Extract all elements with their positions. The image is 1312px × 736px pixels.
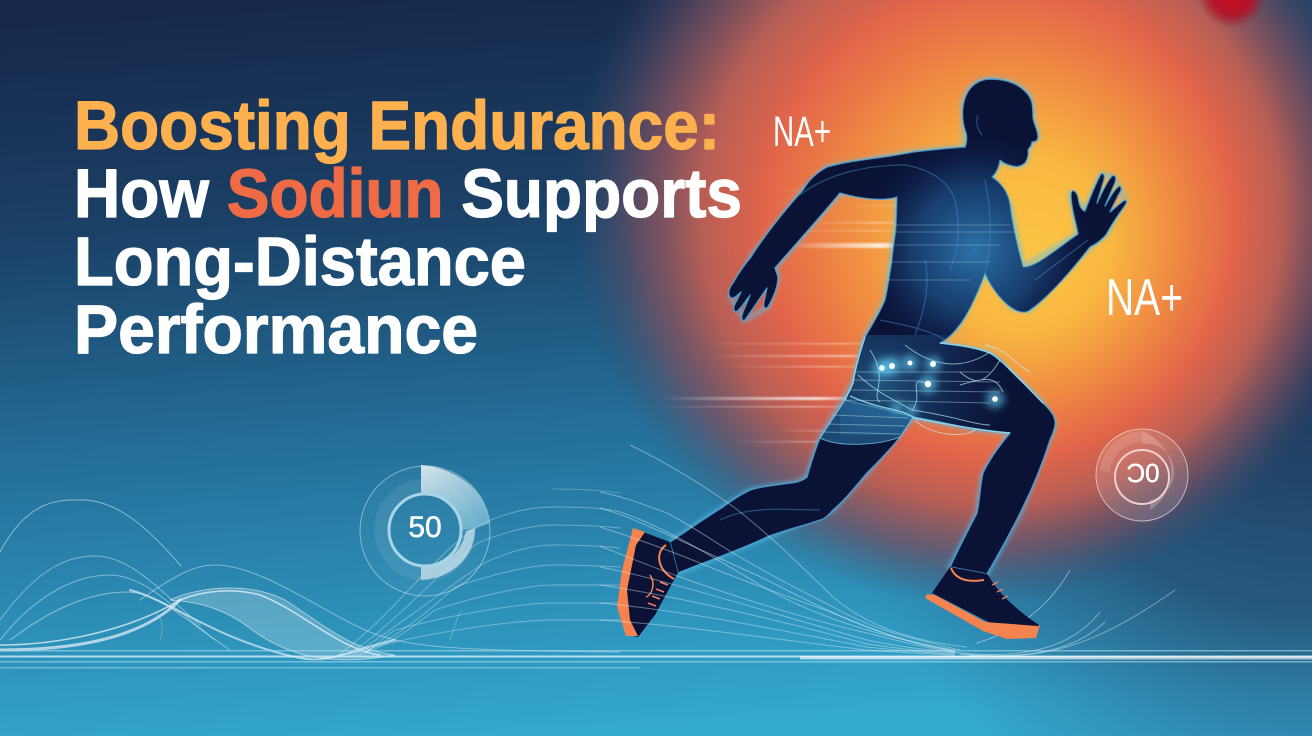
shorts streaks bbox=[824, 372, 1000, 434]
gauge lower arc bbox=[421, 528, 475, 580]
translucent wave ribbon bbox=[170, 588, 395, 660]
ground light lines bbox=[0, 650, 1312, 668]
title line: Boosting Endurance: Boosting Endurance: bbox=[74, 87, 720, 164]
speed streaks behind runner bbox=[650, 190, 960, 442]
rear shoe sole bbox=[617, 528, 645, 636]
title line: Performance: Performance bbox=[74, 291, 478, 368]
front shoe laces bbox=[992, 582, 1008, 599]
gauge: 50 bbox=[360, 465, 490, 596]
front shoe bbox=[925, 567, 1040, 639]
gauge value: 50 bbox=[408, 511, 442, 544]
nerve lines bbox=[858, 345, 1030, 435]
fan lines converging under runner bbox=[600, 445, 967, 655]
title bbox=[74, 87, 742, 368]
runner rim glow bbox=[670, 79, 1125, 574]
shorts lower panel bbox=[820, 400, 913, 444]
hip rim light bbox=[845, 337, 1043, 433]
hip and shorts energy section bbox=[820, 335, 1043, 444]
front shoe sole bbox=[925, 594, 1040, 639]
rear shoe laces bbox=[648, 582, 668, 606]
glowing sodium points bbox=[873, 355, 1004, 416]
gauge upper arc bbox=[421, 465, 490, 530]
torso musculature bbox=[882, 144, 1082, 352]
front shoe collar bbox=[951, 568, 984, 581]
runner bbox=[617, 79, 1127, 639]
gauge disc bbox=[1096, 429, 1188, 521]
gauge inner ring bbox=[389, 494, 461, 566]
rear shoe upper bbox=[622, 530, 678, 637]
sodium label, left of head: NA+ bbox=[773, 108, 831, 156]
title line: How Sodiun Supports: How Sodiun Supports bbox=[74, 155, 742, 232]
torso speed streaks bbox=[888, 225, 1015, 280]
rear shoe swoosh bbox=[646, 575, 653, 597]
gauge: right bbox=[1096, 429, 1188, 521]
gauge soft band bbox=[381, 486, 469, 574]
flowing wave lines bbox=[0, 489, 1175, 659]
gauge inner ring bbox=[1115, 450, 1169, 504]
gauge value: Ɔ0 bbox=[1126, 458, 1160, 488]
rear shoe bbox=[617, 528, 678, 637]
body contour highlights bbox=[720, 115, 1088, 570]
red corner spot bbox=[1190, 0, 1270, 34]
glowing hip fill bbox=[840, 335, 986, 435]
gauge left arc bbox=[1100, 431, 1142, 472]
runner silhouette bbox=[670, 79, 1127, 574]
gauge right arc bbox=[1142, 431, 1174, 510]
gauge outer ring bbox=[360, 466, 490, 596]
sodium label, right of arm: NA+ bbox=[1106, 269, 1183, 327]
title line: Long-Distance: Long-Distance bbox=[74, 223, 526, 300]
front shoe upper bbox=[932, 567, 1039, 632]
rear shoe collar bbox=[659, 545, 674, 579]
